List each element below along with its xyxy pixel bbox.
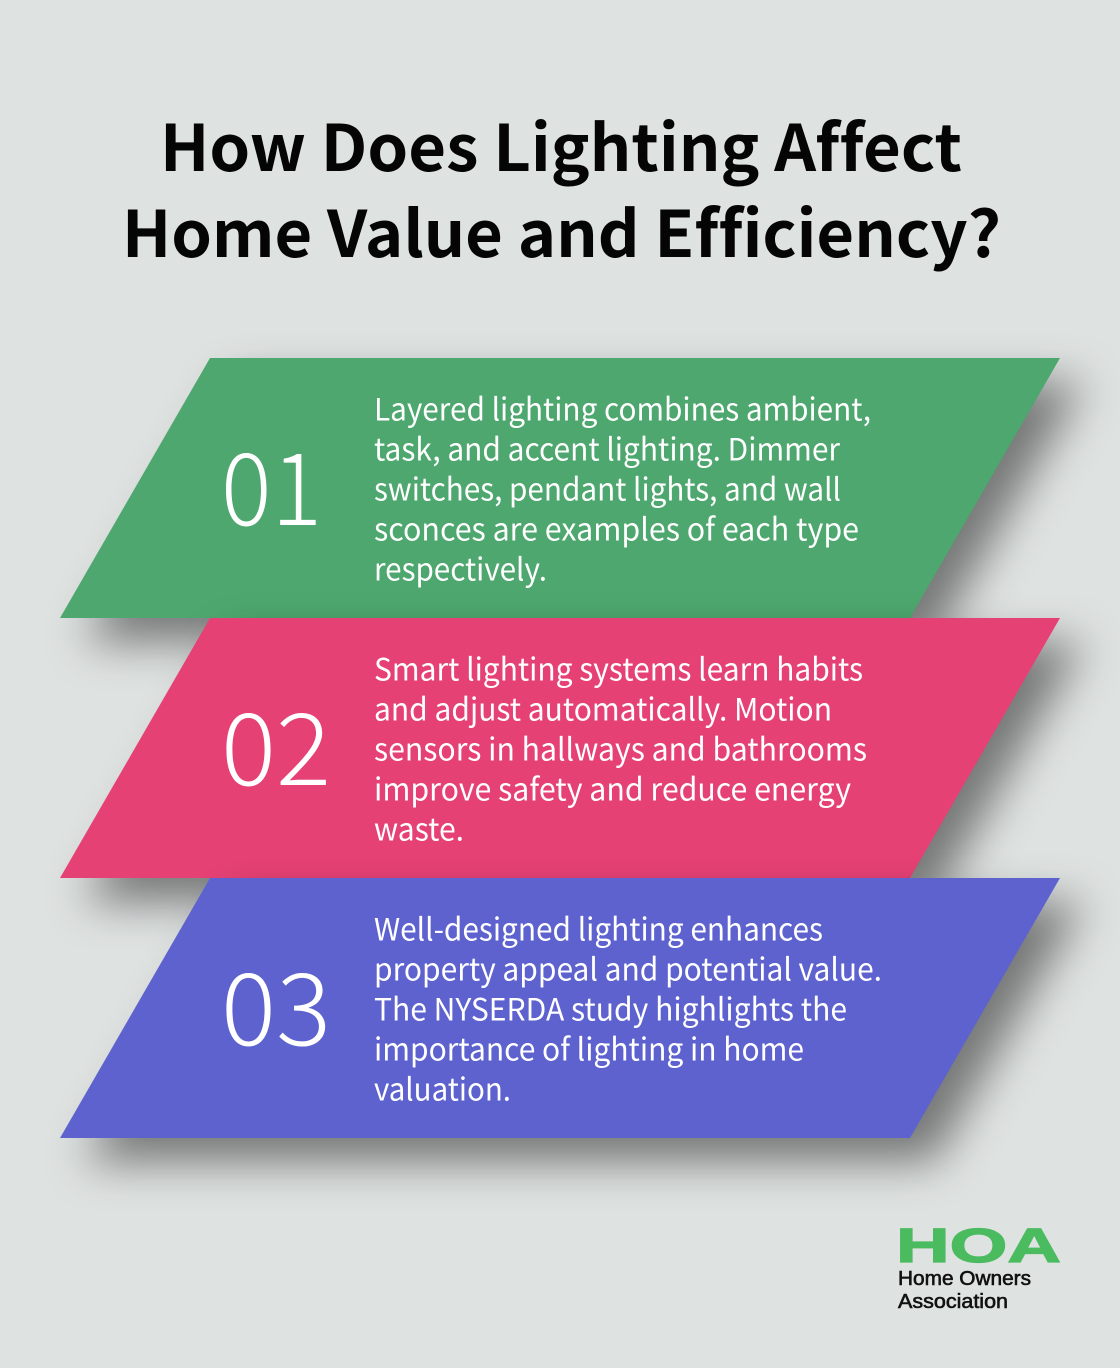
logo: HOA Home Owners Association: Association bbox=[898, 1291, 1008, 1313]
step 03 text: The NYSERDA study highlights the bbox=[374, 984, 847, 1030]
step number 03: 03 bbox=[221, 929, 331, 1074]
step 03 text: valuation. bbox=[374, 1064, 511, 1110]
step 01 text: Layered lighting combines ambient, bbox=[374, 384, 871, 430]
step 01 text: sconces are examples of each type bbox=[374, 504, 859, 550]
step 03 text: property appeal and potential value. bbox=[374, 944, 882, 990]
step number 01: 01 bbox=[221, 409, 322, 554]
step 03 text: importance of lighting in home bbox=[374, 1024, 804, 1070]
step 01 text bbox=[374, 384, 871, 590]
step 02 text: sensors in hallways and bathrooms bbox=[374, 724, 867, 770]
step number 02: 02 bbox=[221, 669, 331, 814]
logo: HOA Home Owners Association: HOA bbox=[896, 1220, 1061, 1273]
panel: step 03 bbox=[60, 878, 1084, 1162]
panel: step 02 bbox=[60, 618, 1084, 902]
title bbox=[122, 98, 1001, 276]
panel: step 01 bbox=[60, 358, 1084, 642]
step 01 text: respectively. bbox=[374, 544, 547, 590]
step 02 text: and adjust automatically. Motion bbox=[374, 684, 832, 730]
step 02 text: Smart lighting systems learn habits bbox=[374, 644, 863, 690]
step 03 text bbox=[374, 904, 882, 1110]
step 01 text: task, and accent lighting. Dimmer bbox=[374, 424, 841, 470]
step 02 text: improve safety and reduce energy bbox=[374, 764, 851, 810]
step 02 text bbox=[374, 644, 867, 850]
step 02 text: waste. bbox=[374, 804, 464, 850]
step 03 text: Well-designed lighting enhances bbox=[374, 904, 823, 950]
title: How Does Lighting Affect bbox=[160, 98, 962, 190]
title: Home Value and Efficiency? bbox=[122, 184, 1001, 276]
logo: HOA Home Owners Association: Home Owners bbox=[898, 1268, 1031, 1290]
step 01 text: switches, pendant lights, and wall bbox=[374, 464, 841, 510]
logo: HOA Home Owners Association bbox=[896, 1220, 1061, 1313]
